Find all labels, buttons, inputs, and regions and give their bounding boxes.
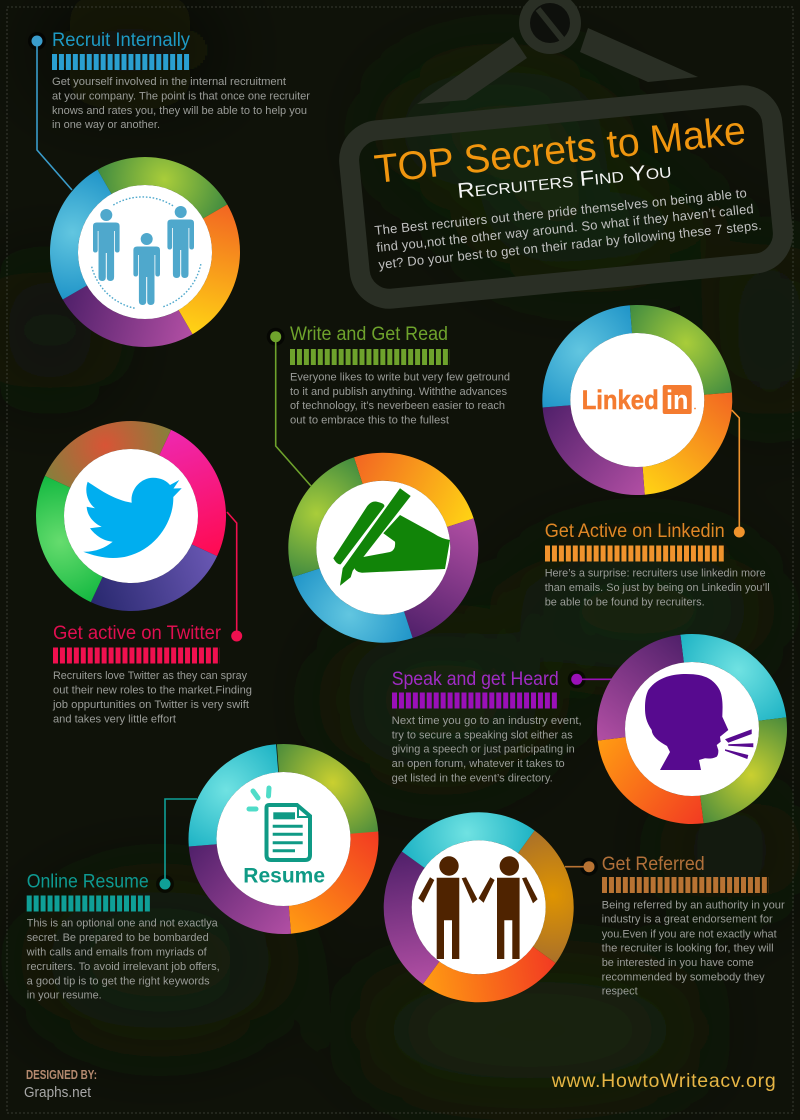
panel: write and get read [264,324,510,667]
striped bar [602,877,769,893]
text block: get listed in the event’s directory. [392,772,553,784]
text block: than emails. So just by being on Linkedin you’ll [545,582,770,594]
text block: Get yourself involved in the internal recruitment [52,76,286,88]
text block: Being referred by an authority in your [602,899,785,911]
text block: secret. Be prepared to be bombarded [27,932,209,944]
striped bar [290,349,450,365]
striped bar [545,546,725,562]
text block: in your resume. [27,990,102,1002]
icon: linkedin logo: in [666,385,688,415]
text block: at your company. The point is that once one recruiter [52,90,310,102]
text block [290,372,510,427]
intro text: The Best recruiters out there pride themselves on being able to [374,185,747,238]
donut ring [346,775,611,1040]
text block: recruiters. To avoid irrelevant job offers, [27,961,220,973]
text block: you.Even if you are not exactly what [602,928,777,940]
panel: get active on linkedin [535,298,770,608]
title: TOP Secrets to Make [372,109,748,192]
panel: recruit internally [15,30,310,382]
connector [565,858,598,876]
connector [227,512,242,642]
donut ring [264,428,503,667]
text block: a good tip is to get the right keywords [27,975,210,987]
text block: giving a speech or just participating in [392,744,575,756]
striped bar [27,896,152,912]
heading: Speak and get Heard [392,669,559,690]
icon: two people holding hands [418,856,538,959]
heading: Get Referred [602,854,705,875]
striped bar [52,54,191,70]
text block: Here’s a surprise: recruiters use linkedin more [545,568,766,580]
donut ring [15,122,275,382]
footer credit: Graphs.net [24,1085,91,1101]
icon: speaking head [645,674,753,770]
text block [26,918,220,1002]
striped bar [53,648,220,664]
text block: try to secure a speaking slot either as [392,729,573,741]
text block [545,568,770,608]
text block: an open forum, whatever it takes to [392,758,565,770]
text block: Recruiters love Twitter as they can spray [53,670,247,682]
icon: three people [92,197,201,308]
intro text: find you,not the other way around. So what if they haven’t called [376,201,754,255]
footer credit: DESIGNED BY: [26,1067,97,1082]
panel: online resume [26,738,386,1002]
text block: the recruiter is looking for, they will [602,943,774,955]
text block: to it and publish anything. Withthe advances [290,386,508,398]
text block: of technology, it’s neverbeen easier to reach [290,400,505,412]
connector [568,670,612,688]
connector [267,328,311,486]
panel: speak and get heard [392,623,798,835]
text block: This is an optional one and not exactlya [27,918,219,930]
text block: recommended by somebody they [602,971,765,983]
icon: linkedin logo: Linked [582,385,659,415]
donut ring [5,390,257,642]
heading: Recruit Internally [52,30,190,51]
donut ring [535,298,739,502]
text block: Everyone likes to write but very few getround [290,372,510,384]
text block: be able to be found by recruiters. [545,596,705,608]
donut ring [586,623,798,835]
text block: in one way or another. [52,119,160,131]
text block: out to embrace this to the fullest [290,415,449,427]
text block [602,899,785,998]
text block: respect [602,986,638,998]
connector [28,32,72,190]
footer website: www.HowtoWriteacv.org [551,1070,776,1092]
text block: be interested in you have come [602,957,754,969]
icon: twitter bird [83,478,182,558]
striped bar [392,692,558,708]
sign frame [346,93,786,301]
donut ring [181,738,386,941]
text block: out their new roles to the market.Finding [53,685,252,697]
text block [392,715,582,784]
text block [52,670,252,726]
heading: Write and Get Read [290,324,448,345]
icon: hand writing with pen [333,488,450,586]
connector [156,799,197,893]
text block: and takes very little effort [53,714,176,726]
heading: Get active on Twitter [53,623,222,644]
intro text [374,185,762,272]
heading: Get Active on Linkedin [545,521,725,542]
intro text: yet? Do your best to get on their radar by following these 7 steps. [378,217,762,272]
text block: job oppurtunities on Twitter is very swift [52,699,249,711]
icon: resume document: Resume [243,864,325,887]
text block [52,76,310,131]
hanging sign panel [346,0,786,301]
footer credit [24,1067,97,1101]
subtitle: Recruiters Find You [456,159,672,203]
panel: get referred [346,775,785,1040]
text block: with calls and emails from myriads of [26,946,208,958]
text block: knows and rates you, they will be able to to help you [52,105,307,117]
text block: industry is a great endorsement for [602,914,773,926]
sign hanger straps and screw [417,0,698,104]
icon: resume document [243,788,325,887]
connector [732,410,745,538]
panel: get active on twitter [5,390,257,726]
text block: Next time you go to an industry event, [392,715,582,727]
heading: Online Resume [27,872,149,893]
